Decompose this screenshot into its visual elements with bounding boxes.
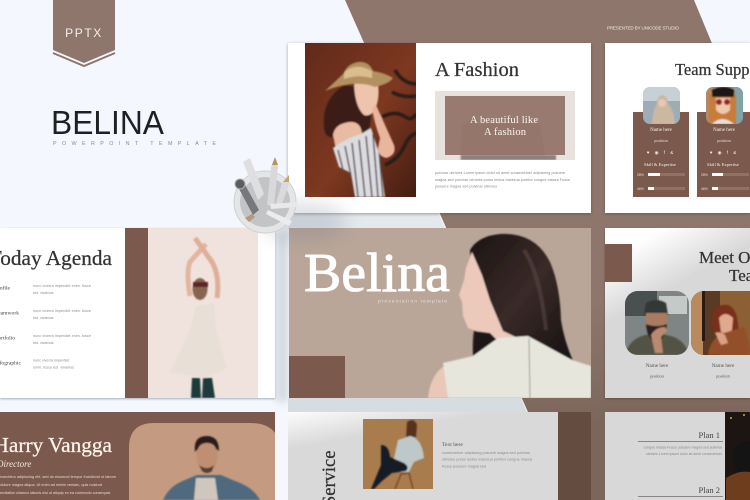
pen cup soft shadow (263, 202, 347, 242)
team captions: position (650, 374, 665, 378)
soft grey shadows behind slides (276, 213, 527, 412)
agenda list: est. vivamus (33, 316, 54, 320)
biography text (0, 475, 116, 495)
text block (442, 442, 533, 468)
ribbon badge: PPTX: PPTX (65, 26, 103, 40)
team card 1 (633, 87, 689, 197)
plan 1: ultricies Lorem ipsum dolor sit amet consectetuer (646, 452, 723, 456)
photo: woman in hat (305, 43, 417, 197)
team card 2: 46% (701, 187, 708, 191)
brown strip (125, 228, 148, 398)
plan 2: Plan 2 (698, 485, 720, 495)
diagonal brown backdrop (345, 0, 750, 500)
image banner with caption (435, 91, 575, 160)
text block: Fusce posuere magna sed (442, 464, 486, 468)
agenda list: nunc viverra imperdiet enim. fusce (33, 334, 91, 338)
plan 2 (638, 485, 723, 497)
text block: consectetuer adipiscing posuere magna sed pulvinar (442, 451, 531, 455)
body text (435, 171, 570, 188)
team card 2: Name here (713, 128, 736, 133)
portrait: red-haired woman (691, 291, 750, 355)
team card 2: 28% (701, 173, 708, 177)
team card 1: 28% (637, 173, 644, 177)
subtitle: powerpoint template: POWERPOINT TEMPLATE (53, 141, 216, 147)
plan 1 (638, 430, 723, 456)
square accent (605, 244, 632, 282)
team captions (646, 363, 735, 378)
body text: pulvinar ultricies Lorem ipsum dolor sit amet consectetuer adipiscing posuere (435, 171, 565, 175)
team card 2: Skill & Expertise (707, 162, 739, 167)
team captions: position (716, 374, 731, 378)
brown strip (558, 412, 591, 500)
plan 1: Plan 1 (698, 430, 720, 440)
heading: Belina: Belina (304, 242, 450, 303)
team card 2: position (717, 138, 732, 143)
slide: Meet Our Team (605, 228, 750, 398)
team card 1: position (654, 138, 669, 143)
team card 1: 46% (637, 187, 644, 191)
photo: man in denim jacket (129, 423, 275, 500)
photo: woman with dark hair (428, 234, 591, 398)
agenda list: nunc viverra imperdiet enim. fusce (33, 284, 91, 288)
plan 1: congue massa Fusce posuere magna sed pulvinar (644, 446, 723, 450)
slide: Belina cover (289, 228, 591, 398)
photo: dancer (148, 228, 258, 398)
team captions: Name here (646, 363, 669, 369)
agenda list (0, 284, 91, 370)
title: BELINA: BELINA (51, 104, 164, 141)
photo: dark portrait (725, 412, 750, 500)
image banner with caption: A fashion (484, 127, 527, 138)
label: presented by: PRESENTED BY UNICODE STUDIO (607, 26, 679, 30)
subheading: presentation template (378, 298, 447, 304)
slide: Harry Vangga (0, 412, 275, 500)
ribbon badge: PPTX (53, 0, 115, 66)
slide: Today Agenda (0, 228, 275, 398)
slide: Plans (605, 412, 750, 500)
heading: Meet Our Team (699, 248, 750, 285)
slide: A Fashion (288, 43, 591, 213)
body text: posuere magna sed pulvinar ultricies (435, 184, 497, 188)
photo: seated woman (363, 419, 433, 489)
slide: Team Support (605, 43, 750, 213)
team captions: Name here (712, 363, 735, 369)
heading: A Fashion: A Fashion (435, 59, 519, 81)
body text: magna sed pulvinar ultricies purus lectus malesua portitor congue massa Fusce (435, 178, 570, 182)
agenda list: nunc viverra imperdiet (33, 358, 69, 362)
icon: pen cup (234, 157, 298, 233)
social icons: ♥ ◉ f & (710, 150, 738, 155)
team card 1: Skill & Expertise (644, 162, 676, 167)
agenda list: est. vivamus (33, 341, 54, 345)
text block: Text here (442, 442, 463, 448)
team card 2 (697, 87, 750, 197)
social icons: ♥ ◉ f & (647, 150, 675, 155)
slide: Service (288, 412, 591, 500)
agenda list: enim. fusce est. vivamus (33, 366, 74, 370)
image banner with caption: A beautiful like (470, 115, 538, 126)
team card 1: Name here (650, 128, 673, 133)
portrait: bearded man (625, 291, 689, 355)
agenda list: est. vivamus (33, 291, 54, 295)
square accent (289, 356, 345, 398)
agenda list: nunc viverra imperdiet enim. fusce (33, 309, 91, 313)
text block: ultricies purus lectus malesua portitor congue massa (442, 458, 533, 462)
